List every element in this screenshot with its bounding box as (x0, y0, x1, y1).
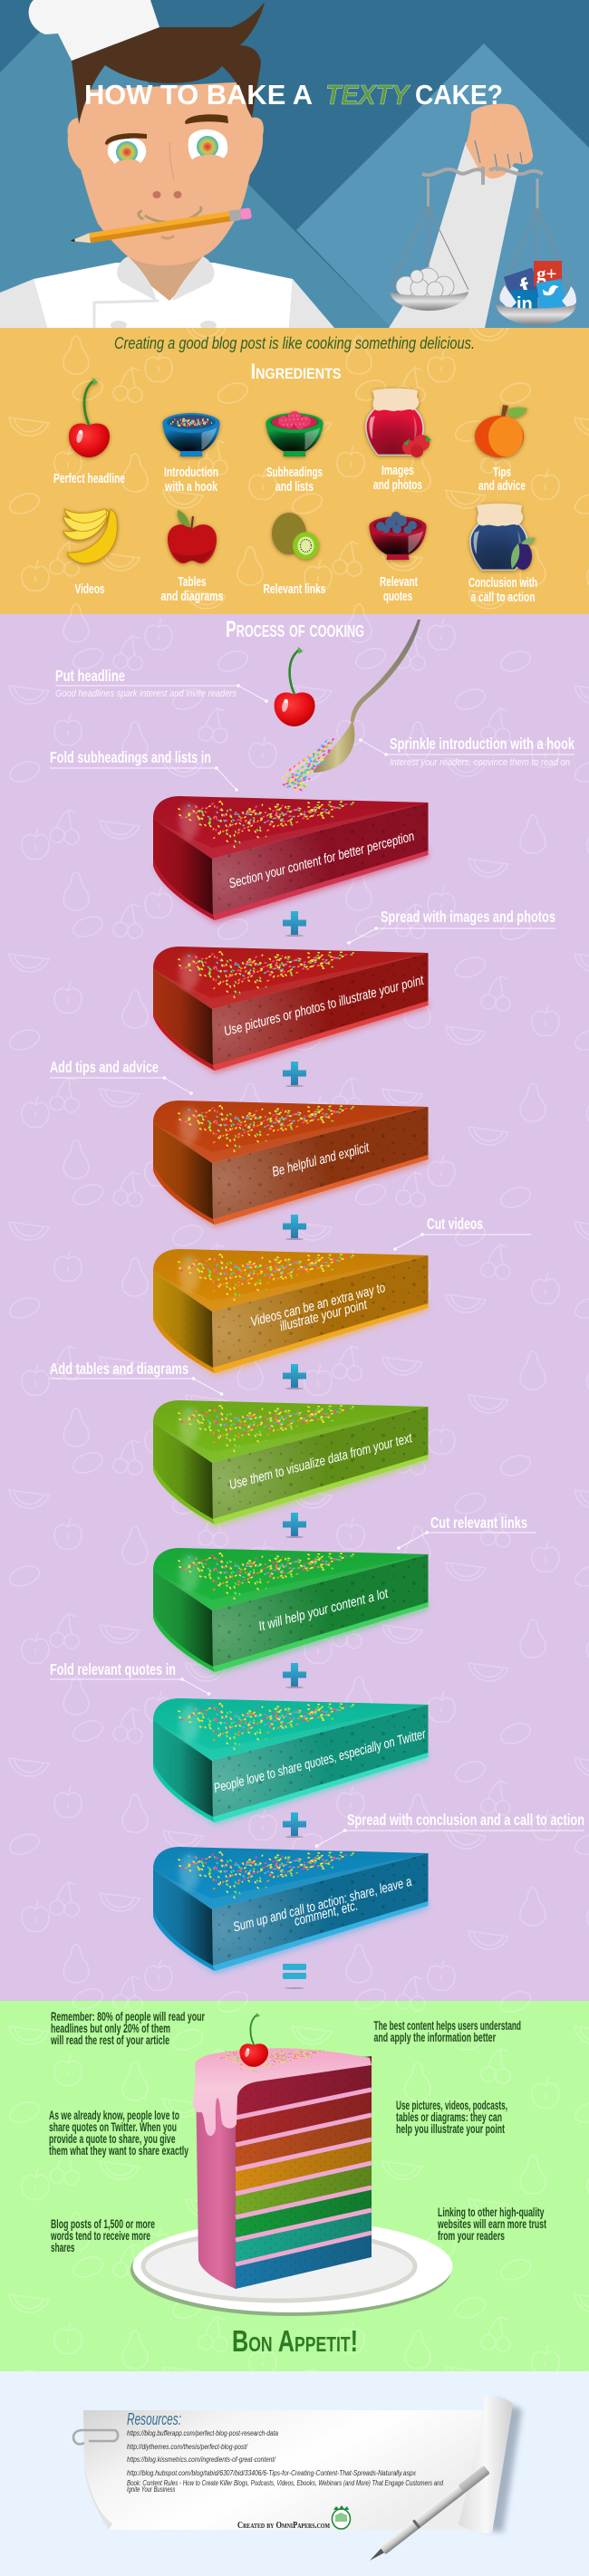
callout: cut relevant links (397, 1514, 536, 1550)
tagline: Creating a good blog post is like cooking something delicious. (114, 334, 475, 352)
label: relevant links: Relevant links (263, 582, 326, 597)
icon: blueberry bowl (370, 512, 426, 560)
fruit outline pattern (0, 328, 589, 2371)
balance scale beam (422, 167, 543, 208)
callout: add tips (50, 1058, 193, 1095)
layered cake (193, 2013, 372, 2289)
label: tables and diagrams: Tables (178, 575, 207, 590)
chef jacket (0, 263, 334, 330)
callout: put headline (55, 667, 268, 703)
icon: kiwi (272, 513, 319, 560)
callout: spread with images (347, 908, 555, 945)
plus sign (283, 911, 306, 937)
cake slice: sum up: Sum up and call to action: share, leave a (232, 1874, 413, 1935)
cake slice: be helpful (153, 1101, 428, 1227)
text block: quotes: provide a quote to share, you give (49, 2131, 176, 2146)
heading: process of cooking: Process of cooking (226, 617, 364, 642)
hand (466, 104, 533, 178)
panel: resources background (0, 2371, 589, 2576)
text block: quotes (49, 2108, 188, 2158)
label: subheadings and lists (266, 466, 323, 495)
callout: cut videos: Cut videos (427, 1215, 483, 1233)
cake slice: be helpful: Be helpful and explicit (270, 1139, 372, 1180)
icon: twitter tile (536, 279, 565, 310)
plus sign (283, 1663, 306, 1688)
label: tables and diagrams (161, 575, 223, 604)
scroll with resources (73, 2396, 522, 2564)
callout: cut relevant links: Cut relevant links (430, 1514, 527, 1532)
label: relevant quotes: quotes (383, 590, 412, 604)
cake slice: videos: illustrate your point (278, 1297, 370, 1334)
panel: process background (0, 614, 589, 2001)
plate (130, 2220, 453, 2316)
pink frosting (193, 2048, 372, 2136)
cake slice: use them: Use them to visualize data from your text (227, 1430, 414, 1493)
icon: spoon with sprinkles (283, 620, 420, 790)
header panel (0, 0, 589, 330)
icon: peach (475, 405, 527, 457)
callout: add tips: Add tips and advice (50, 1058, 159, 1076)
mouth (139, 207, 201, 238)
cake slice: section your content (153, 796, 428, 923)
chef hair (72, 2, 265, 124)
resource links: http://diythemes.com/thesis/perfect-blog-post/ (127, 2443, 248, 2451)
resource links: http://blog.hubspot.com/blog/tabid/6307/bid/33406/6-Tips-for-Creating-Content-That-Spreads-Naturally.aspx (127, 2469, 417, 2477)
callout: cut videos (393, 1215, 531, 1251)
icon: linkedin tile: in (517, 294, 533, 314)
label: images and photos (373, 464, 422, 493)
title (84, 79, 503, 111)
heading: resources: Resources: (127, 2410, 181, 2428)
text block: remember: Remember: 80% of people will read your (51, 2009, 205, 2023)
text block: remember (50, 2009, 205, 2047)
icon: strawberry jam jar (366, 389, 431, 457)
icon: process cherry (275, 647, 315, 726)
cake slice: help your content: It will help your content a lot (257, 1586, 391, 1634)
text block: remember: headlines but only 20% of them (51, 2021, 170, 2035)
heading: ingredients: Ingredients (250, 360, 341, 384)
icon: cherry (69, 378, 110, 457)
icon: raspberry bowl (266, 411, 323, 457)
plus sign (283, 1513, 306, 1538)
icon: omnipapers logo (332, 2505, 350, 2529)
panel: ingredients (53, 334, 537, 605)
label: subheadings and lists: and lists (275, 480, 314, 495)
cake slice: videos: Videos can be an extra way to (249, 1280, 387, 1330)
label: introduction with a hook: with a hook (164, 480, 218, 495)
icon: sprinkles bowl (163, 413, 219, 457)
icon: google plus tile: g+ (536, 263, 556, 284)
text block: best content (373, 2018, 521, 2044)
scale right pan with social icons (496, 208, 576, 325)
label: introduction with a hook: Introduction (164, 466, 218, 480)
resource links: Ignite Your Business (127, 2485, 176, 2494)
icon: bananas (63, 509, 117, 563)
icon: plum jam jar (470, 504, 536, 570)
cake slice: use pictures: Use pictures or photos to illustrate your point (222, 973, 426, 1039)
text block: use pictures: Use pictures, videos, podcasts, (396, 2098, 507, 2112)
cake slice: share quotes: People love to share quotes, especially on Twitter (212, 1726, 428, 1796)
text block: use pictures (396, 2098, 507, 2136)
label: tips and advice: and advice (478, 479, 526, 494)
sprinkles on frosting (217, 2049, 325, 2074)
label: subheadings and lists: Subheadings (266, 466, 323, 480)
cake slice: videos (153, 1249, 428, 1376)
panel: ingredients background (0, 328, 589, 614)
label: introduction with a hook (164, 466, 218, 495)
callout: add tables: Add tables and diagrams (50, 1360, 188, 1378)
nose (152, 142, 181, 198)
label: relevant quotes: Relevant (380, 575, 418, 590)
label: conclusion with a call to action: Conclusion with (468, 576, 537, 591)
icon: apple (168, 510, 217, 563)
cake slice: help your content (153, 1548, 428, 1675)
text block: blog posts: words tend to receive more (50, 2228, 150, 2243)
chef arm sleeve (389, 142, 518, 328)
icon: facebook tile: f (517, 273, 534, 303)
cake slice: use them (153, 1400, 428, 1527)
callout: fold relevant quotes (50, 1660, 210, 1696)
label: tables and diagrams: and diagrams (161, 590, 223, 604)
callout: fold subheadings: Fold subheadings and lists in (50, 748, 211, 766)
text block: blog posts (50, 2216, 155, 2254)
label: images and photos: Images (381, 464, 414, 478)
text block: use pictures: help you illustrate your point (396, 2121, 505, 2136)
text block: quotes: share quotes on Twitter. When you (49, 2119, 177, 2134)
callout: spread with conclusion (315, 1811, 584, 1848)
resource links: https://blog.bufferapp.com/perfect-blog-post-research-data (127, 2429, 278, 2437)
equals sign (283, 1964, 306, 1989)
icon: paperclip (73, 2430, 118, 2444)
chef hat (29, 0, 159, 61)
callout: put headline: Put headline (55, 667, 125, 685)
text block: quotes: them what they want to share exactly (49, 2143, 188, 2158)
text block: quotes: As we already know, people love to (49, 2108, 179, 2122)
plus sign (283, 1364, 306, 1389)
text block: linking: from your readers (438, 2228, 505, 2243)
cake layers (236, 2056, 372, 2289)
resource links: https://blog.kissmetrics.com/ingredients-of-great-content/ (127, 2456, 276, 2464)
label: relevant quotes (380, 575, 418, 604)
title: TEXTY (325, 79, 411, 111)
panel: result background (0, 2001, 589, 2371)
eyes (108, 130, 227, 172)
pencil (70, 207, 252, 246)
label: tips and advice: Tips (493, 466, 511, 480)
cake slice: share quotes (153, 1698, 428, 1825)
label: conclusion with a call to action (468, 576, 537, 605)
callout: put headline: Good headlines spark interest and invite readers (55, 688, 237, 699)
title: HOW TO BAKE A (84, 79, 313, 111)
label: tips and advice (478, 466, 526, 494)
label: conclusion with a call to action: a call to action (471, 591, 535, 605)
label: images and photos: and photos (373, 478, 422, 493)
cake slice: use pictures (153, 947, 428, 1073)
icon: cake cherry (239, 2013, 268, 2067)
text block: linking (437, 2205, 546, 2243)
callout: fold relevant quotes: Fold relevant quotes in (50, 1660, 176, 1678)
heading: bon appetit: Bon Appetit! (232, 2324, 358, 2358)
text block: blog posts: Blog posts of 1,500 or more (51, 2216, 155, 2231)
text block: best content: and apply the information better (373, 2030, 496, 2044)
credit line: Created by OmniPapers.com (237, 2521, 330, 2531)
chef neck and collar (117, 245, 214, 301)
title: CAKE? (415, 79, 503, 111)
scale left pan with paper balls (390, 207, 468, 311)
eyebrows (105, 114, 228, 145)
resource links: Book: Content Rules - How to Create Killer Blogs, Podcasts, Videos, Ebooks, Webinars (and More) That Engage Customers and (127, 2479, 443, 2487)
callout: sprinkle introduction (359, 735, 575, 768)
resource links (127, 2429, 443, 2494)
plus sign (283, 1062, 306, 1087)
label: perfect headline: Perfect headline (53, 472, 125, 486)
text block: remember: will read the rest of your article (50, 2033, 169, 2047)
plus sign (283, 1812, 306, 1838)
cake slice: sum up (153, 1847, 428, 1974)
callout: add tables (50, 1360, 223, 1396)
label: videos: Videos (74, 582, 105, 597)
chef face (68, 82, 264, 265)
text block: use pictures: tables or diagrams: they can (396, 2110, 502, 2124)
plus sign (283, 1215, 306, 1240)
callout: fold subheadings (50, 748, 238, 792)
text block: blog posts: shares (51, 2240, 75, 2254)
cake slice: section your content: Section your content for better perception (227, 829, 416, 891)
cake slice: sum up: comment, etc. (293, 1898, 360, 1929)
icon: pen (367, 2465, 490, 2564)
